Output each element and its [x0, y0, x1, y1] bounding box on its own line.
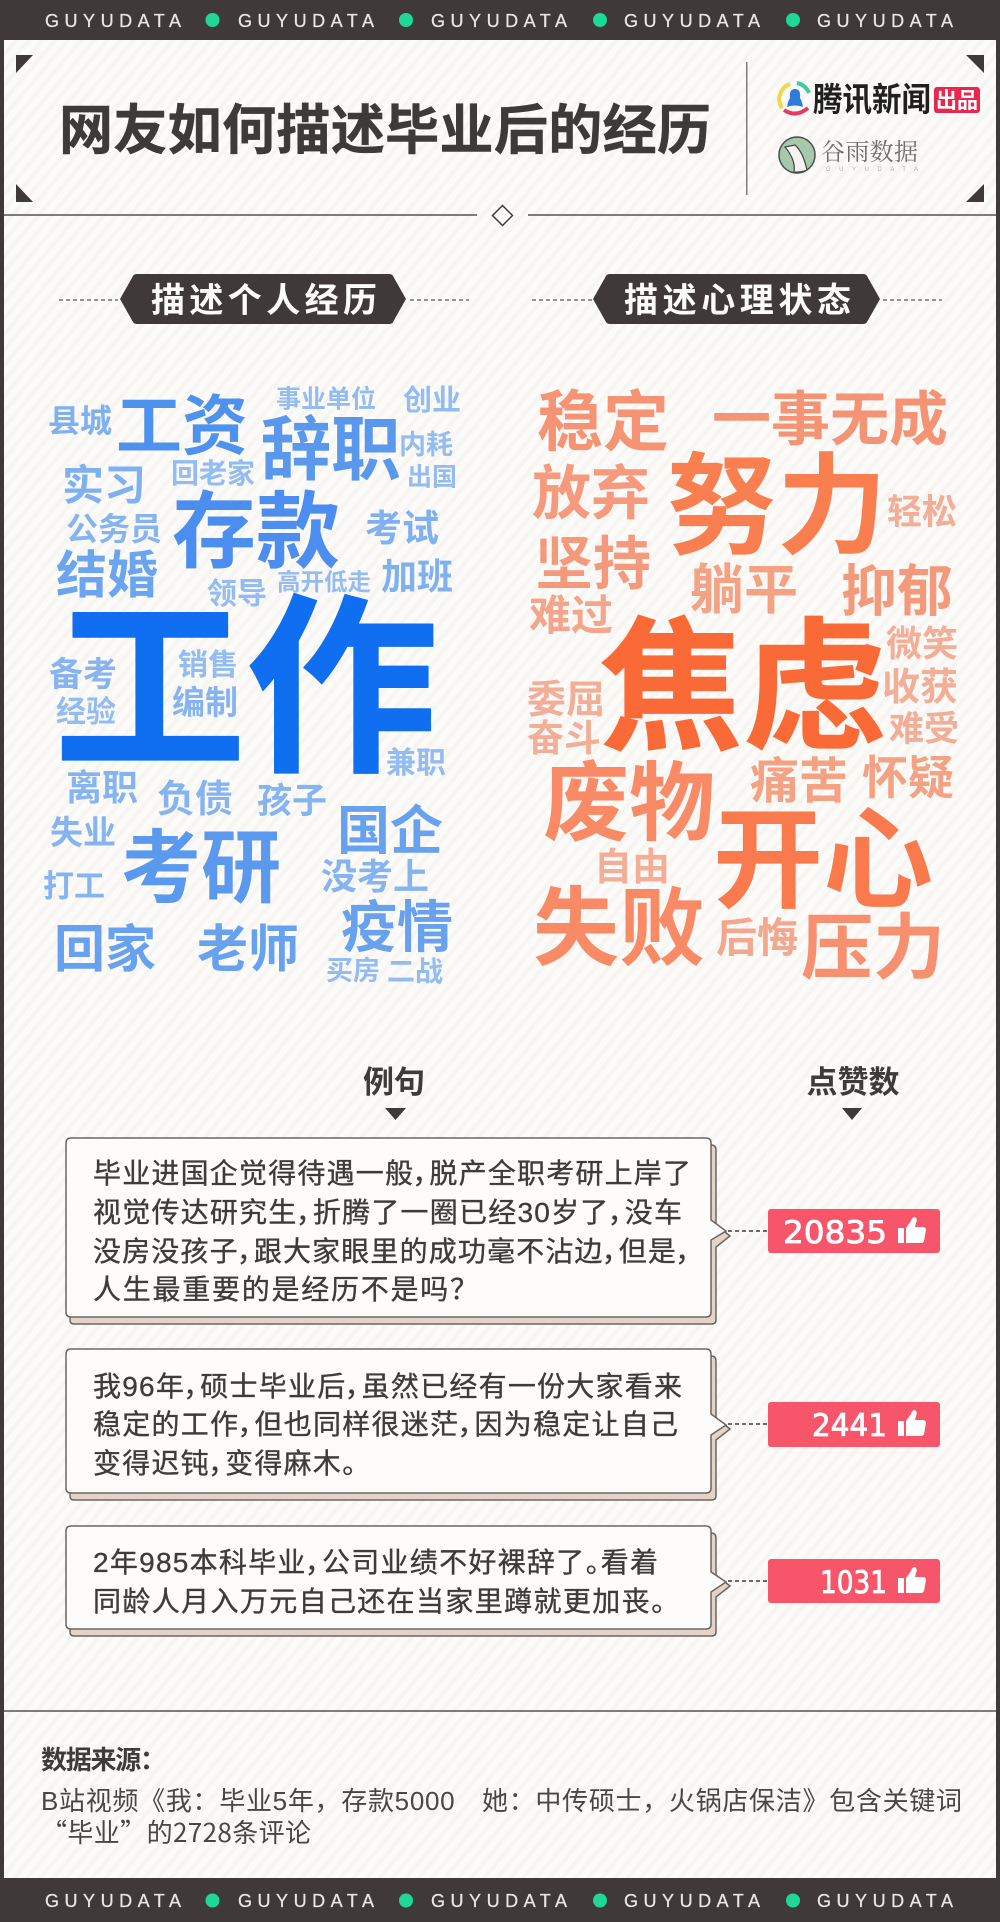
word: 考试: 考试: [365, 508, 439, 549]
word: 考研: 考研: [121, 824, 281, 913]
quote card 3: [66, 1526, 730, 1636]
word: 结婚: 结婚: [56, 547, 158, 604]
word: 微笑: 微笑: [886, 623, 958, 664]
quote text 2: [93, 1371, 682, 1479]
like badge 3: 1031: [820, 1565, 887, 1601]
heading: mental state: [532, 274, 942, 324]
word: 二战: 二战: [387, 956, 443, 987]
heading: personal experience: 描述个人经历: [151, 282, 377, 320]
icon: thumb up: [898, 1567, 926, 1593]
word: 后悔: 后悔: [716, 915, 798, 961]
word: 稳定: 稳定: [537, 385, 669, 459]
column heading: likes: [806, 1065, 900, 1120]
logo: Guyu Data: GUYUDATA: [826, 167, 918, 173]
quote text 1: 视觉传达研究生，折腾了一圈已经30岁了，没车: [93, 1197, 682, 1228]
bottom brand band: GUYUDATA: [45, 1891, 181, 1911]
word: 兼职: 兼职: [386, 747, 446, 780]
bottom brand band: GUYUDATA: [817, 1891, 953, 1911]
word: 工作: 工作: [54, 582, 438, 797]
data source: [41, 1745, 962, 1850]
quote text 2: 我96年，硕士毕业后，虽然已经有一份大家看来: [93, 1371, 682, 1402]
quote text 3: 2年985本科毕业，公司业绩不好裸辞了。看着: [93, 1547, 658, 1578]
bottom brand band: [45, 1891, 953, 1911]
title: 网友如何描述毕业后的经历: [59, 101, 711, 161]
word cloud: personal experience: [43, 384, 461, 987]
word: 工资: 工资: [116, 389, 248, 463]
word: 失败: 失败: [533, 881, 705, 977]
word cloud: mental state: [527, 385, 959, 989]
top brand band: GUYUDATA: [45, 11, 181, 31]
quote text 1: [93, 1158, 691, 1305]
word: 县城: 县城: [48, 403, 112, 439]
word: 奋斗: 奋斗: [527, 718, 601, 759]
quote text 1: 没房没孩子，跟大家眼里的成功毫不沾边，但是，: [93, 1236, 691, 1267]
word: 委屈: 委屈: [527, 679, 605, 722]
top brand band: GUYUDATA: [238, 11, 374, 31]
word: 国企: 国企: [337, 802, 443, 861]
word: 痛苦: 痛苦: [750, 755, 848, 809]
word: 公务员: 公务员: [66, 511, 162, 547]
logo: Tencent News: [779, 81, 980, 118]
word: 一事无成: 一事无成: [712, 387, 948, 453]
quote text 3: [93, 1547, 665, 1617]
logo: Tencent News: 出品: [936, 88, 978, 113]
word: 实习: 实习: [62, 462, 146, 509]
word: 收获: 收获: [882, 667, 958, 709]
word: 怀疑: 怀疑: [862, 752, 954, 804]
word: 努力: 努力: [667, 446, 887, 569]
top brand band: [45, 11, 953, 31]
quote card 2: [66, 1349, 730, 1500]
icon: thumb up: [898, 1410, 926, 1436]
word: 回家: 回家: [54, 921, 156, 978]
word: 失业: 失业: [50, 814, 116, 851]
word: 孩子: 孩子: [257, 782, 327, 821]
data source: 数据来源：: [41, 1745, 166, 1775]
header divider with diamond: [4, 206, 996, 226]
top brand band: GUYUDATA: [817, 11, 953, 31]
word: 没考上: 没考上: [321, 856, 429, 897]
word: 疫情: 疫情: [341, 896, 453, 959]
quote text 3: 同龄人月入万元自己还在当家里蹲就更加丧。: [93, 1586, 665, 1617]
logo: Guyu Data: 谷雨数据: [821, 139, 918, 166]
logo: Tencent News: 腾讯新闻: [813, 81, 931, 118]
bottom brand band: GUYUDATA: [238, 1891, 374, 1911]
word: 领导: 领导: [207, 578, 267, 611]
word: 负债: 负债: [157, 779, 233, 821]
word: 自由: 自由: [594, 847, 670, 889]
word: 离职: 离职: [66, 767, 138, 808]
word: 高开低走: 高开低走: [277, 569, 371, 595]
column heading: example sentences: 例句: [363, 1065, 425, 1100]
quote text 1: 人生最重要的是经历不是吗？: [93, 1274, 464, 1305]
column heading: likes: 点赞数: [806, 1065, 900, 1100]
word: 开心: 开心: [713, 800, 933, 923]
word: 买房: 买房: [326, 956, 380, 986]
word: 经验: 经验: [56, 696, 116, 729]
like badge 2: 2441: [812, 1408, 887, 1444]
word: 打工: 打工: [43, 869, 105, 904]
bottom brand band: GUYUDATA: [431, 1891, 567, 1911]
word: 回老家: 回老家: [171, 458, 255, 489]
word: 焦虑: 焦虑: [599, 608, 887, 769]
like badge 1: [768, 1209, 940, 1253]
word: 压力: 压力: [801, 909, 945, 989]
word: 加班: 加班: [381, 556, 453, 597]
word: 放弃: 放弃: [532, 461, 650, 527]
connector 3: [728, 1580, 767, 1582]
like badge 1: 20835: [783, 1215, 887, 1251]
word: 销售: 销售: [178, 649, 238, 682]
data source: “毕业”的2728条评论: [41, 1813, 311, 1850]
word: 坚持: 坚持: [535, 532, 651, 597]
word: 难过: 难过: [529, 592, 613, 639]
word: 轻松: 轻松: [887, 493, 957, 532]
column heading: example sentences: [363, 1065, 425, 1120]
word: 出国: 出国: [407, 464, 457, 492]
top brand band: GUYUDATA: [624, 11, 760, 31]
word: 存款: 存款: [172, 485, 340, 579]
connector 2: [728, 1423, 767, 1425]
icon: thumb up: [898, 1217, 926, 1243]
connector 1: [728, 1230, 767, 1232]
word: 辞职: 辞职: [261, 411, 401, 489]
word: 废物: 废物: [543, 756, 715, 852]
heading: personal experience: [59, 274, 469, 324]
word: 难受: 难受: [889, 710, 959, 749]
bottom brand band: GUYUDATA: [624, 1891, 760, 1911]
word: 躺平: 躺平: [690, 560, 798, 620]
like badge 2: [768, 1402, 940, 1447]
word: 编制: 编制: [172, 684, 238, 721]
data source: B站视频《我：毕业5年，存款5000 她：中传硕士，火锅店保洁》包含关键词: [41, 1786, 962, 1816]
logo: Guyu Data: [779, 137, 918, 173]
header corner marks: [16, 55, 984, 202]
heading: mental state: 描述心理状态: [624, 282, 851, 320]
word: 抑郁: 抑郁: [841, 560, 953, 623]
quote text 1: 毕业进国企觉得待遇一般，脱产全职考研上岸了: [93, 1158, 691, 1189]
word: 备考: 备考: [49, 656, 117, 694]
quote card 1: [66, 1138, 730, 1324]
word: 老师: 老师: [197, 921, 299, 978]
quote text 2: 变得迟钝，变得麻木。: [93, 1448, 356, 1479]
word: 创业: 创业: [403, 384, 461, 417]
top brand band: GUYUDATA: [431, 11, 567, 31]
quote text 2: 稳定的工作，但也同样很迷茫，因为稳定让自己: [93, 1409, 678, 1440]
word: 事业单位: 事业单位: [276, 384, 376, 414]
like badge 3: [768, 1559, 940, 1603]
word: 内耗: 内耗: [399, 430, 453, 460]
